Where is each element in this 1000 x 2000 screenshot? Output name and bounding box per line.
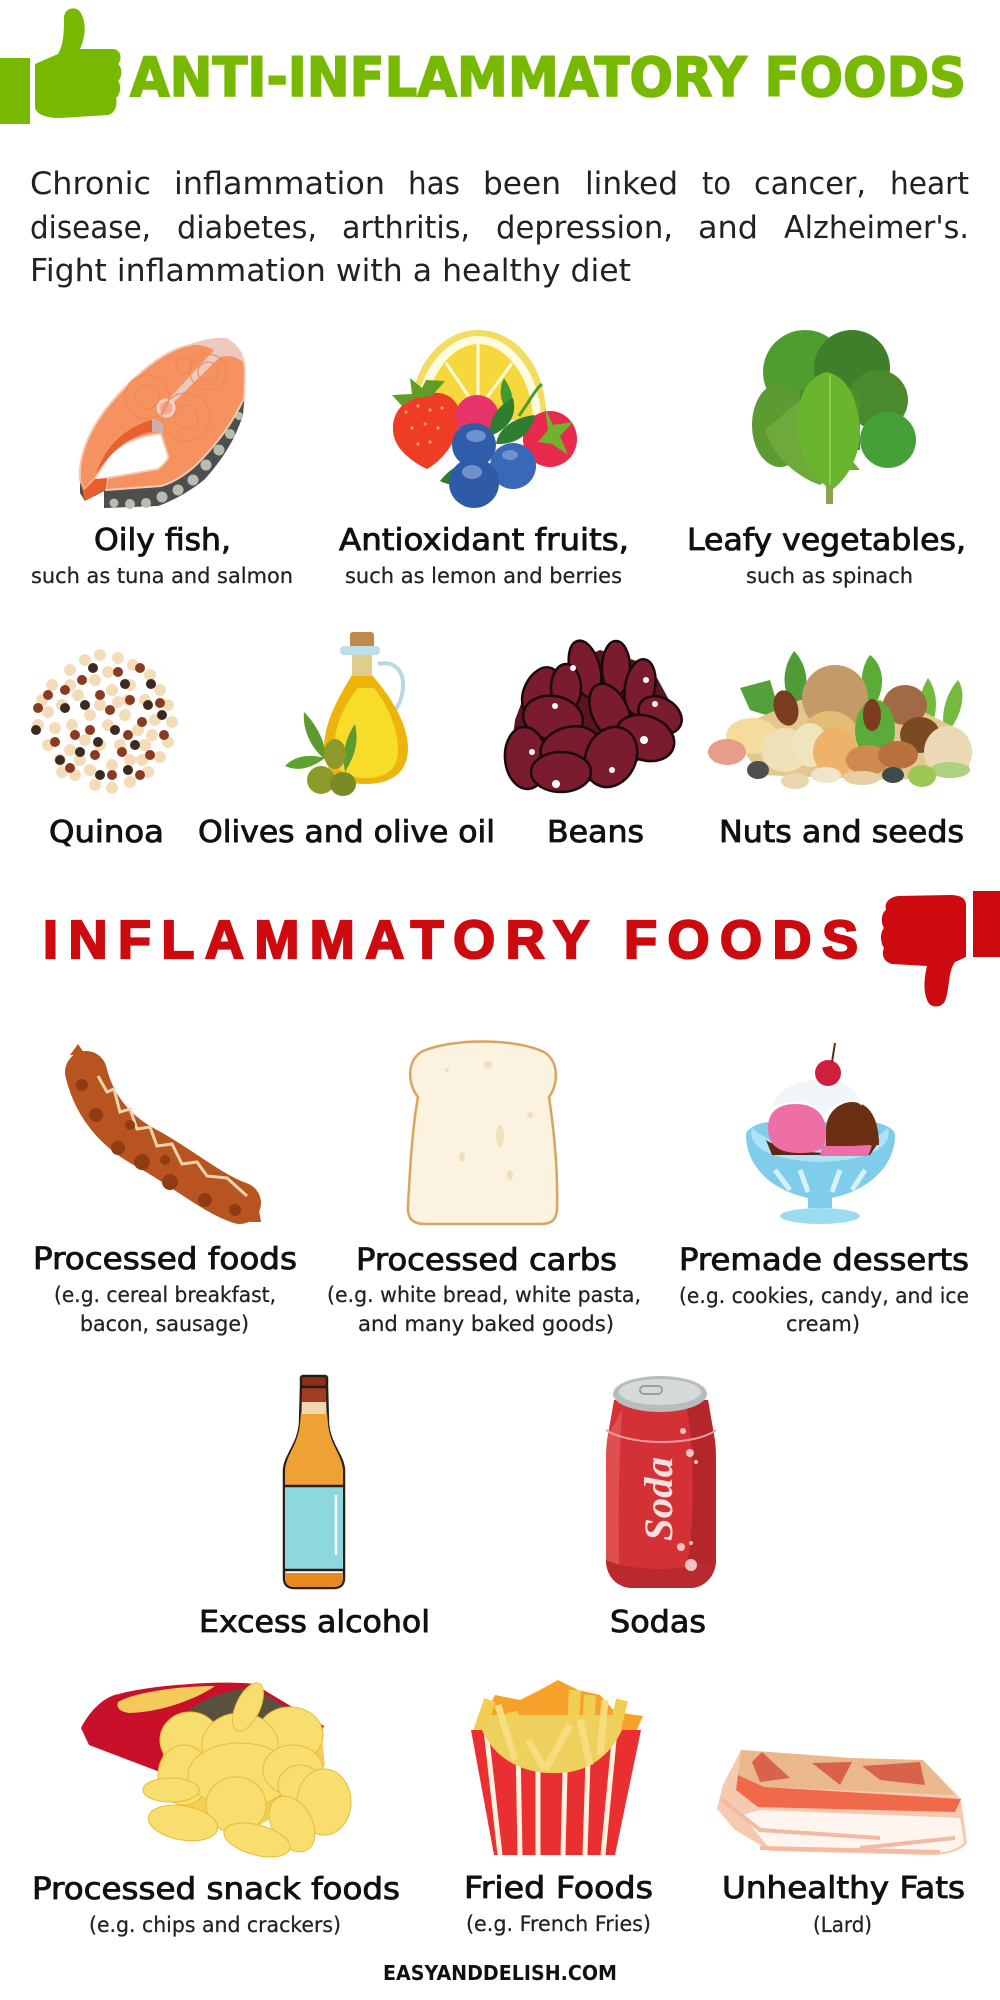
label: fried foods: Fried Foods <box>464 1871 653 1906</box>
icon: bread slice <box>408 1042 557 1224</box>
icon: thumbs down <box>881 891 1000 1007</box>
icon: quinoa <box>36 655 172 788</box>
label: premade desserts: Premade desserts <box>679 1243 969 1278</box>
icon: lard slab <box>717 1750 967 1855</box>
label: premade desserts <box>679 1243 969 1336</box>
label: excess alcohol: Excess alcohol <box>199 1605 430 1640</box>
label: oily fish <box>31 523 293 588</box>
intro text block: linked <box>585 166 678 202</box>
icon: olive oil bottle <box>285 632 408 796</box>
intro text block: been <box>483 166 561 202</box>
label: leafy vegetables: such as spinach <box>746 564 913 588</box>
label: sodas: Sodas <box>610 1605 706 1640</box>
label: processed foods: (e.g. cereal breakfast, <box>54 1283 276 1307</box>
label: oily fish: Oily fish, <box>94 523 231 558</box>
intro text block: and <box>698 210 758 246</box>
intro text block: diabetes, <box>177 210 317 246</box>
label: premade desserts: cream) <box>786 1312 860 1336</box>
icon: nuts and seeds <box>708 651 972 789</box>
icon: ice cream sundae <box>746 1043 895 1224</box>
intro text block: to <box>702 166 731 202</box>
label: quinoa: Quinoa <box>49 815 164 850</box>
icon: spinach <box>752 330 916 504</box>
intro text block: arthritis, <box>342 210 470 246</box>
label: antioxidant fruits: such as lemon and berries <box>345 564 622 588</box>
intro text block: has <box>408 166 460 202</box>
footer: website: EASYANDDELISH.COM <box>383 1961 617 1985</box>
intro text block: Chronic <box>30 166 151 202</box>
intro text block: disease, <box>30 210 151 246</box>
intro text block: cancer, <box>754 166 866 202</box>
label: unhealthy fats: (Lard) <box>813 1913 872 1937</box>
icon: salmon steak <box>80 339 245 509</box>
intro text block: Fight inflammation with a healthy diet <box>30 253 631 289</box>
icon: soda can: Soda <box>636 1457 681 1541</box>
label: antioxidant fruits: Antioxidant fruits, <box>339 523 629 558</box>
label: processed carbs: Processed carbs <box>356 1243 617 1278</box>
label: nuts and seeds: Nuts and seeds <box>719 815 964 850</box>
title: anti-inflammatory foods: ANTI-INFLAMMATORY FOODS <box>130 46 966 109</box>
icon: sausage <box>70 1044 261 1222</box>
label: beans: Beans <box>547 815 644 850</box>
intro text block: inflammation <box>174 166 385 202</box>
label: antioxidant fruits <box>339 523 629 588</box>
label: processed foods: Processed foods <box>33 1242 297 1277</box>
label: processed snack foods <box>32 1872 400 1937</box>
label: fried foods <box>464 1871 653 1936</box>
label: unhealthy fats <box>722 1871 965 1937</box>
intro text block: Alzheimer's. <box>784 210 969 246</box>
label: leafy vegetables: Leafy vegetables, <box>687 523 966 558</box>
label: unhealthy fats: Unhealthy Fats <box>722 1871 965 1906</box>
label: processed carbs: (e.g. white bread, white pasta, <box>327 1283 641 1307</box>
label: fried foods: (e.g. French Fries) <box>466 1912 651 1936</box>
intro text block <box>30 166 969 289</box>
icon: soda can <box>606 1376 716 1588</box>
icon: french fries <box>471 1680 643 1855</box>
label: premade desserts: (e.g. cookies, candy, and ice <box>679 1284 969 1308</box>
label: olives and olive oil: Olives and olive oil <box>198 815 495 850</box>
label: processed carbs: and many baked goods) <box>358 1312 614 1336</box>
intro text block: heart <box>890 166 969 202</box>
icon: beer bottle <box>284 1376 344 1588</box>
label: oily fish: such as tuna and salmon <box>31 564 293 588</box>
label: processed carbs <box>327 1243 641 1336</box>
label: leafy vegetables <box>687 523 966 588</box>
icon: thumbs up <box>0 8 121 124</box>
label: processed foods <box>33 1242 297 1336</box>
heading: inflammatory foods: INFLAMMATORY FOODS <box>43 910 858 970</box>
icon: potato chips <box>81 1678 351 1863</box>
icon: lemon and berries <box>392 330 577 508</box>
icon: kidney beans <box>502 637 688 796</box>
label: processed foods: bacon, sausage) <box>80 1312 249 1336</box>
label: processed snack foods: (e.g. chips and crackers) <box>89 1913 341 1937</box>
label: processed snack foods: Processed snack foods <box>32 1872 400 1907</box>
intro text block: depression, <box>496 210 673 246</box>
